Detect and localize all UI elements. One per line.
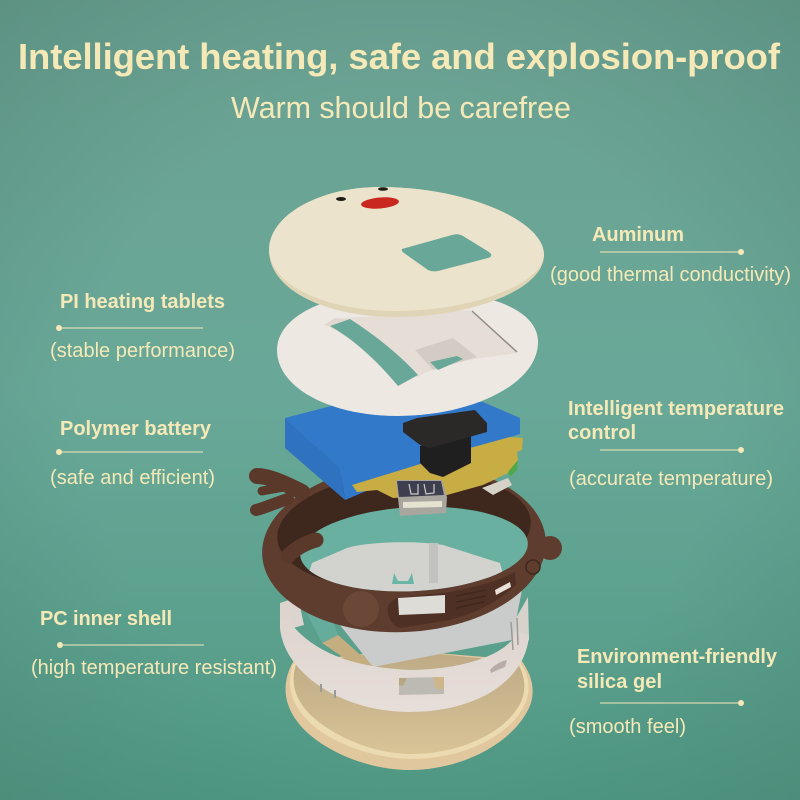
label: Intelligent temperature control: (accurate temperature) xyxy=(569,468,773,490)
label: Environment-friendly silica gel: silica gel xyxy=(577,671,662,693)
shell interior seen through band xyxy=(310,542,502,592)
title: Intelligent heating, safe and explosion-proof xyxy=(18,36,781,77)
product: PC inner shell xyxy=(280,585,529,712)
label: Environment-friendly silica gel: Environment-friendly xyxy=(577,646,778,668)
product: yellow circuit board xyxy=(352,437,523,498)
label: PI heating tablets xyxy=(50,291,235,362)
label: Polymer battery: Polymer battery xyxy=(60,418,212,440)
label: Polymer battery: (safe and efficient) xyxy=(50,467,215,489)
product: black heat block xyxy=(403,410,487,477)
label: Environment-friendly silica gel: (smooth feel) xyxy=(569,716,686,738)
antlers xyxy=(256,476,316,556)
label: Auminum xyxy=(550,224,791,286)
product: polymer battery xyxy=(285,402,520,500)
label: PI heating tablets: (stable performance) xyxy=(50,340,235,362)
label: PC inner shell xyxy=(31,608,277,679)
label: Intelligent temperature control: Intelligent temperature xyxy=(568,398,784,420)
product: brown silicone band xyxy=(256,457,562,639)
product: usb connectors xyxy=(396,478,512,516)
label: Auminum: (good thermal conductivity) xyxy=(550,264,791,286)
product: top aluminum disc xyxy=(269,187,544,317)
label: Environment-friendly silica gel xyxy=(569,646,778,738)
product: bottom gold base xyxy=(286,650,533,770)
label: Auminum: Auminum xyxy=(592,224,684,246)
label: Polymer battery xyxy=(50,418,215,489)
product: middle white shell xyxy=(277,290,538,416)
label: PI heating tablets: PI heating tablets xyxy=(60,291,225,313)
label: Intelligent temperature control xyxy=(568,398,784,490)
label: PC inner shell: PC inner shell xyxy=(40,608,172,630)
label: Intelligent temperature control: control xyxy=(568,422,636,444)
label: PC inner shell: (high temperature resistant) xyxy=(31,657,277,679)
subtitle: Warm should be carefree xyxy=(231,91,571,125)
